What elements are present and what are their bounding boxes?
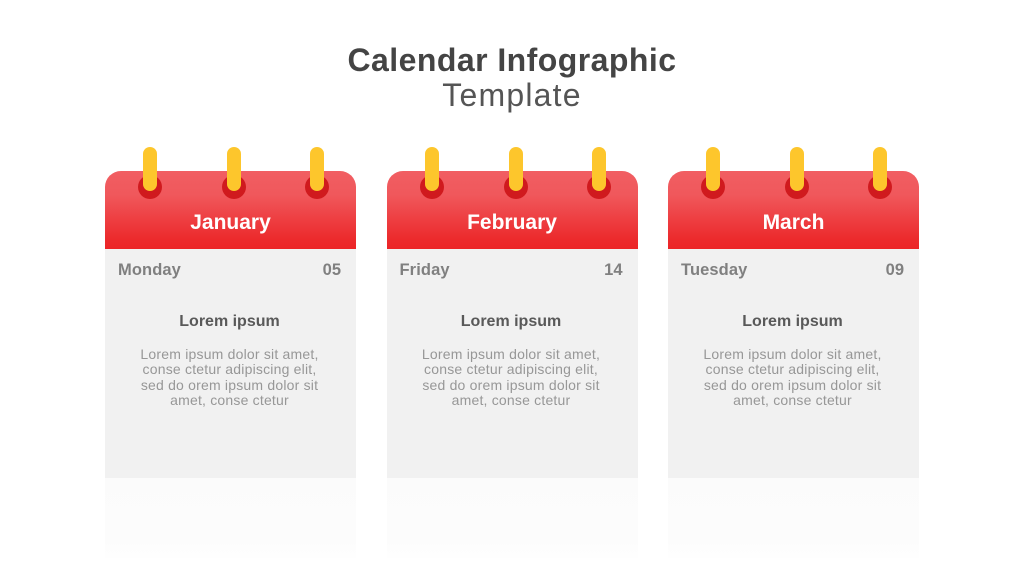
month: March [763,211,824,234]
card reflection [386,478,638,558]
binder ring 3 [592,147,606,191]
binder hole 1 [420,175,444,199]
binder ring 1 [706,147,720,191]
description: conse ctetur adipiscing elit, [424,361,598,377]
title line 2: Template [442,77,582,113]
calendar header [386,171,638,249]
binder ring 1 [143,147,157,191]
binder hole 3 [586,175,610,199]
card reflection [105,478,356,558]
binder hole 2 [785,175,809,199]
month: February [467,211,557,234]
panel: January [105,147,356,478]
panel: March [668,147,919,478]
subheading: Lorem ipsum [179,313,280,330]
date: 14 [604,261,622,279]
subheading: Lorem ipsum [742,313,843,330]
description: Lorem ipsum dolor sit amet, [703,346,882,362]
description [422,346,600,408]
calendar header [668,171,919,249]
card body [386,248,638,478]
binder ring 1 [424,147,438,191]
weekday: Friday [400,261,450,279]
card reflection [668,478,919,558]
binder hole 3 [868,175,892,199]
description: Lorem ipsum dolor sit amet, [422,346,600,362]
title line 1: Calendar Infographic [347,42,677,78]
card body [105,248,356,478]
description: conse ctetur adipiscing elit, [706,361,879,377]
description: Lorem ipsum dolor sit amet, [140,346,319,362]
panel: February [387,147,638,478]
binder hole 2 [504,175,528,199]
weekday: Tuesday [681,261,747,279]
title [347,42,677,113]
description: amet, conse ctetur [733,392,852,408]
description: conse ctetur adipiscing elit, [143,361,316,377]
description: sed do orem ipsum dolor sit [141,377,318,393]
calendar header [105,171,356,249]
binder ring 2 [227,147,241,191]
binder ring 3 [310,147,324,191]
description: sed do orem ipsum dolor sit [704,377,881,393]
subheading: Lorem ipsum [461,313,561,330]
binder ring 3 [873,147,887,191]
date: 09 [886,261,904,279]
description [703,346,882,408]
description [140,346,319,408]
binder ring 2 [790,147,804,191]
binder hole 2 [222,175,246,199]
date: 05 [323,261,341,279]
description: amet, conse ctetur [170,392,289,408]
binder hole 1 [138,175,162,199]
binder hole 1 [701,175,725,199]
description: amet, conse ctetur [452,392,570,408]
binder hole 3 [305,175,329,199]
binder ring 2 [508,147,522,191]
month: January [190,211,271,234]
weekday: Monday [118,261,181,279]
card body [668,248,919,478]
description: sed do orem ipsum dolor sit [422,377,600,393]
